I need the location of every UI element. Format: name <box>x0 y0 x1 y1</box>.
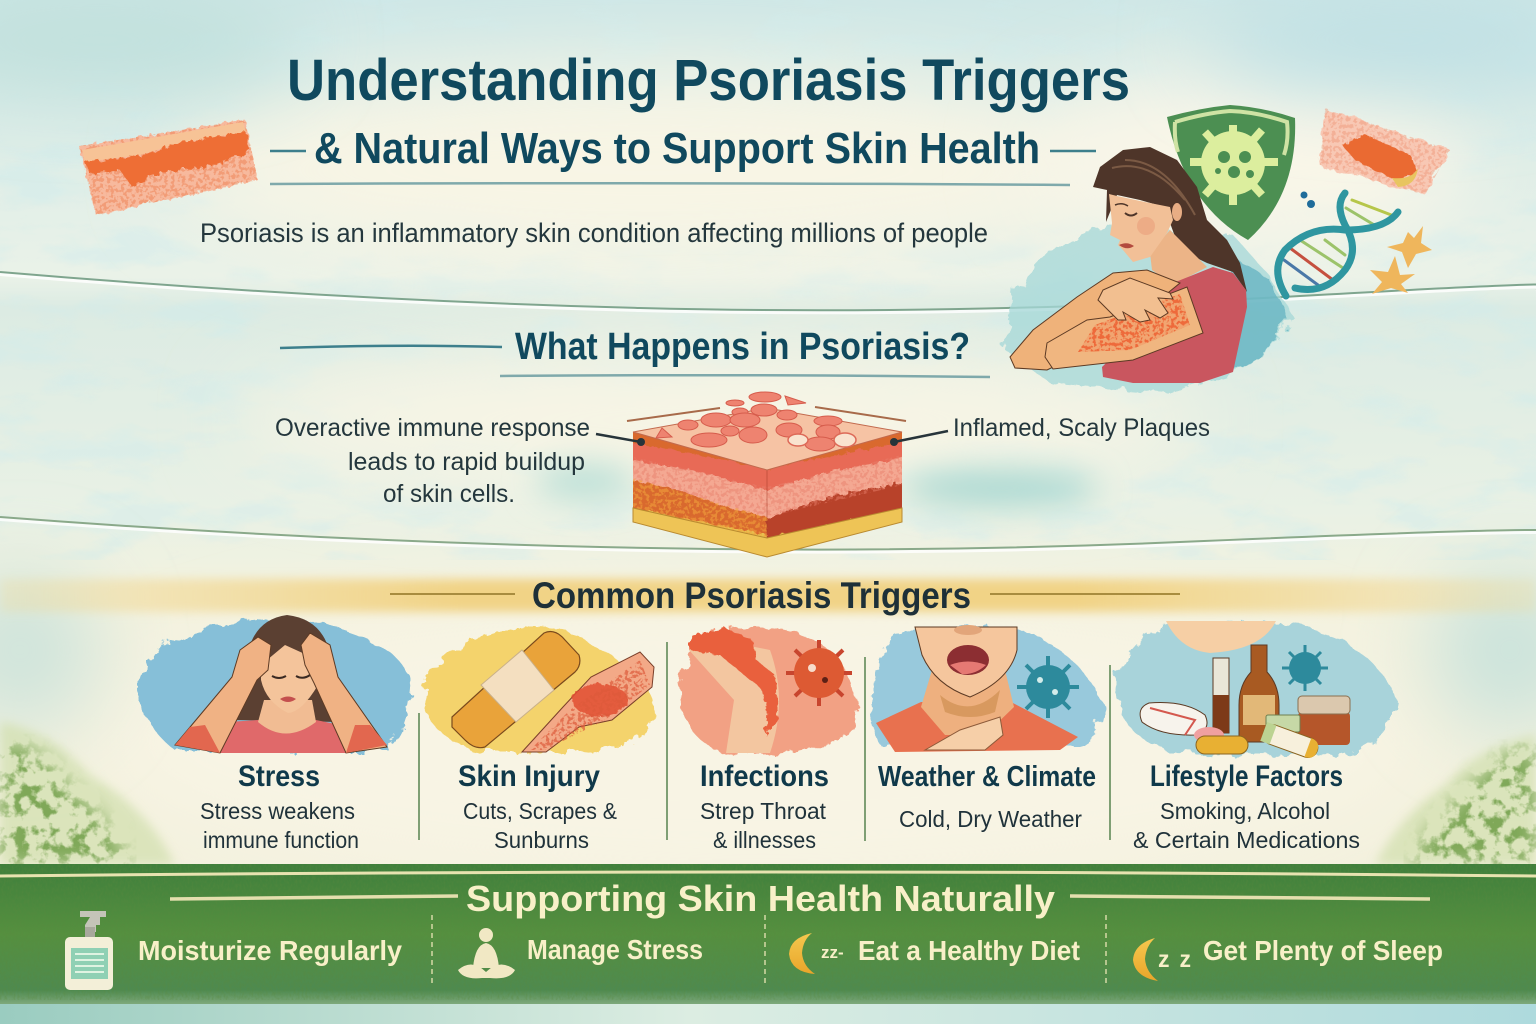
shirt <box>1102 267 1247 383</box>
text: inflamed plaques: Inflamed, Scaly Plaques <box>953 414 1210 442</box>
text: sleep: Get Plenty of Sleep <box>1203 935 1443 966</box>
description: Smoking, Alcohol <box>1160 798 1330 824</box>
text: moisturize: Moisturize Regularly <box>138 935 402 966</box>
panel: stress <box>139 615 412 853</box>
icon: moon sleep <box>1133 938 1191 981</box>
text: overactive immune response: leads to rapid buildup <box>348 448 585 476</box>
icon: lotion bottle <box>65 911 113 990</box>
icon: skin patch right <box>1320 108 1450 195</box>
description <box>463 798 617 853</box>
description: & Certain Medications <box>1133 827 1360 853</box>
face <box>1109 194 1173 262</box>
heading: Weather & Climate <box>878 761 1096 793</box>
description: Strep Throat <box>700 798 827 824</box>
hand <box>1098 278 1173 322</box>
description: Cold, Dry Weather <box>899 806 1082 832</box>
panel: weather and climate <box>870 625 1103 832</box>
icon: stars <box>1370 226 1432 294</box>
shirt <box>218 720 347 753</box>
text: overactive immune response <box>275 414 590 508</box>
description: Sunburns <box>494 827 589 853</box>
icon: moon <box>789 933 844 974</box>
description: immune function <box>203 827 359 853</box>
hair back <box>1093 147 1247 292</box>
description: & illnesses <box>713 827 816 853</box>
panel: infections <box>680 626 857 853</box>
text: overactive immune response: Overactive immune response <box>275 414 590 442</box>
banner: common triggers: Common Psoriasis Triggers <box>532 575 971 616</box>
description <box>200 798 359 853</box>
icon: DNA helix <box>1278 192 1398 296</box>
intro text: Psoriasis is an inflammatory skin condition affecting millions of people <box>200 218 988 248</box>
banner: common triggers <box>0 575 1536 616</box>
icon: meditation <box>458 928 515 978</box>
subtitle: & Natural Ways to Support Skin Health <box>314 124 1040 173</box>
description: Cuts, Scrapes & <box>463 798 617 824</box>
hair <box>232 615 338 722</box>
description: Stress weakens <box>200 798 355 824</box>
panel: lifestyle factors <box>1116 621 1397 853</box>
heading: Infections <box>700 760 829 793</box>
title: Understanding Psoriasis Triggers <box>287 48 1130 113</box>
illustration: woman with psoriasis <box>1005 147 1293 393</box>
panel: skin injury <box>425 626 655 853</box>
card dividers <box>419 642 1110 841</box>
chart: skin cross-section <box>596 392 948 565</box>
back arm <box>1010 270 1180 370</box>
text: overactive immune response: of skin cells. <box>383 480 515 508</box>
icon: moon: zz- <box>821 943 844 962</box>
heading: Lifestyle Factors <box>1150 760 1343 793</box>
description <box>700 798 827 853</box>
heading: what happens: What Happens in Psoriasis? <box>515 326 970 368</box>
heading: Stress <box>238 760 320 793</box>
front arm <box>1045 287 1203 369</box>
right arm <box>301 633 387 753</box>
icon: skin patch left <box>79 120 258 215</box>
icon: shield with virus <box>1167 105 1295 240</box>
left arm <box>175 637 271 753</box>
panel: supporting skin health footer <box>0 864 1536 1024</box>
text: eat healthy: Eat a Healthy Diet <box>858 935 1080 966</box>
heading: Supporting Skin Health Naturally <box>466 878 1055 919</box>
neck <box>1150 230 1207 285</box>
rash <box>1078 294 1190 352</box>
text: manage stress: Manage Stress <box>527 934 703 965</box>
heading: Skin Injury <box>458 760 600 793</box>
icon: moon sleep: zz <box>1158 946 1191 972</box>
description <box>1133 798 1360 853</box>
foliage <box>0 722 175 865</box>
